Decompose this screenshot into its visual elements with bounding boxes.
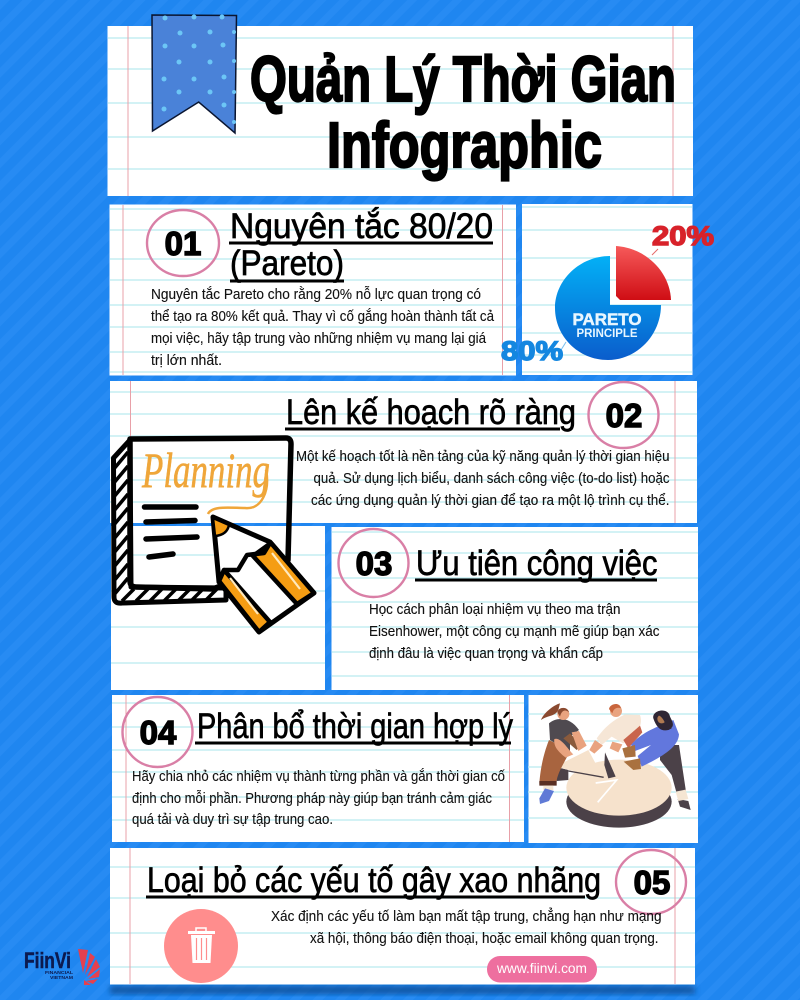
body text [369,602,660,662]
title [250,43,676,181]
heading [229,207,493,283]
icon: planning notebook and pencil: Planning [141,442,270,498]
panel: Pareto chart [501,204,714,375]
body text: Học cách phân loại nhiệm vụ theo ma trận [369,602,620,618]
icon: planning notebook and pencil [113,438,314,632]
body text: định đâu là việc quan trọng và khẩn cấp [369,646,603,662]
pie chart: Pareto principle [501,221,714,366]
website pill [487,956,597,982]
number badge 03: 03 [356,545,392,582]
body text: quả. Sử dụng lịch biểu, danh sách công việc (to-do list) hoặc [314,471,670,487]
number badge 02: 02 [606,397,642,434]
body text [296,449,670,509]
pie chart: Pareto principle: 80% [501,336,563,366]
heading: Nguyên tắc 80/20 [230,207,493,246]
number badge 01: 01 [165,225,201,262]
heading: Phân bổ thời gian hợp lý [197,707,513,746]
pie chart: Pareto principle: 20% [652,221,714,251]
panel: 02 planning [110,381,697,523]
body text: Nguyên tắc Pareto cho rằng 20% nỗ lực quan trọng có [151,286,481,303]
body text: Hãy chia nhỏ các nhiệm vụ thành từng phần và gắn thời gian cố [132,768,505,785]
body text: các ứng dụng quản lý thời gian để tạo ra một lộ trình cụ thể. [311,493,670,509]
number badge 04: 04 [140,714,177,751]
number badge 04 [122,697,192,767]
icon: polka dot bookmark ribbon [152,14,236,133]
logo: FiinVi [24,948,100,985]
pie chart: Pareto principle: PARETO [572,310,642,329]
number badge 01 [147,210,219,276]
panel: blank notebook under planning [111,526,325,690]
heading: Loại bỏ các yếu tố gây xao nhãng [147,861,601,900]
pie chart: Pareto principle: PRINCIPLE [576,328,638,340]
body text: Xác định các yếu tố làm bạn mất tập trung, chẳng hạn như mạng [271,907,662,925]
body text: Một kế hoạch tốt là nền tảng của kỹ năng quản lý thời gian hiệu [296,449,670,465]
body text: mọi việc, hãy tập trung vào những nhiệm vụ mang lại giá [151,331,487,347]
body text: xã hội, thông báo điện thoại, hoặc email không quan trọng. [310,931,658,947]
website pill: www.fiinvi.com [496,960,587,976]
logo: FiinVi: VIETNAM [50,975,73,980]
panel: teamwork illustration [528,695,698,843]
panel: 03 priorities [332,527,698,690]
body text: thể tạo ra 80% kết quả. Thay vì cố gắng hoàn thành tất cả [151,308,495,325]
body text [151,286,495,369]
panel: 04 time allocation [112,695,524,842]
logo: FiinVi: FINANCIAL [45,970,73,975]
icon: trash can [164,909,238,983]
number badge 02 [588,382,658,448]
panel: 05 remove distractions [110,848,695,994]
title: Infographic [327,109,602,181]
body text: Eisenhower, một công cụ mạnh mẽ giúp bạn xác [369,624,660,640]
logo: FiinVi: FiinVi [24,948,71,973]
body text: quá tải và duy trì sự tập trung cao. [132,812,333,828]
body text [132,768,505,828]
number badge 05 [616,850,686,914]
illustration: three people sharing a pie [539,703,691,828]
heading: Lên kế hoạch rõ ràng [286,393,576,432]
panel: header [108,14,693,196]
panel: 01 Pareto rule [110,204,516,376]
body text: trị lớn nhất. [151,353,222,369]
body text [271,907,662,947]
body text: định cho mỗi phần. Phương pháp này giúp bạn tránh cảm giác [132,790,492,807]
heading: (Pareto) [230,244,344,283]
number badge 05: 05 [634,864,670,901]
heading: Ưu tiên công việc [416,544,658,583]
number badge 03 [338,529,408,597]
